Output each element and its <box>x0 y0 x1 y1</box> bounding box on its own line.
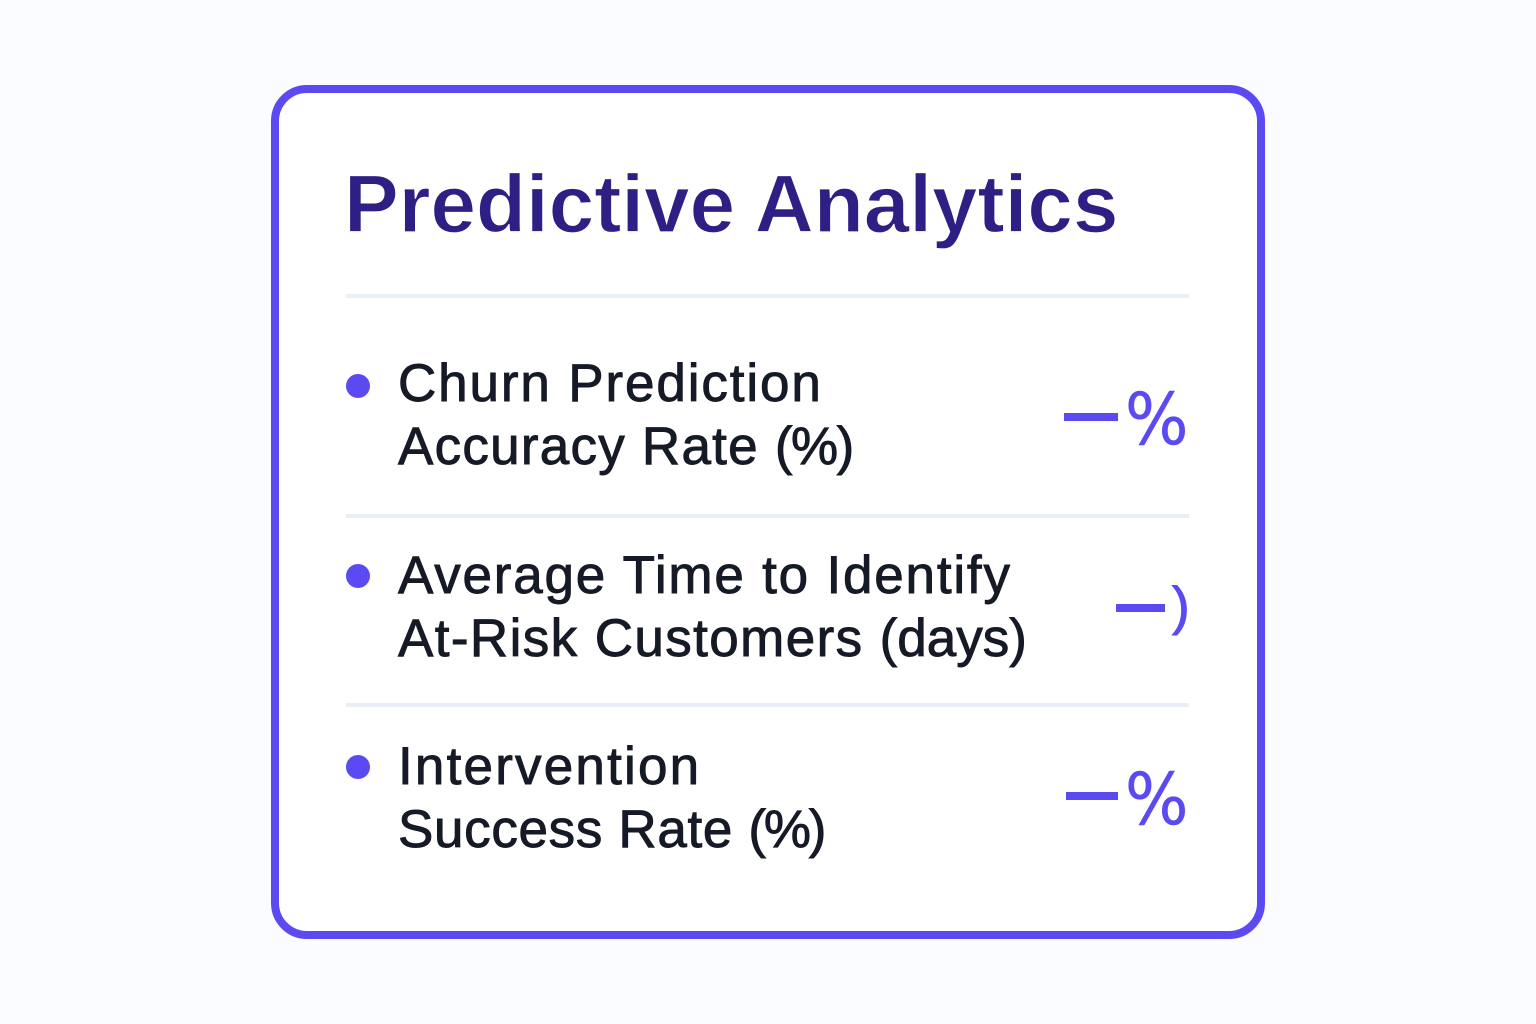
label: churn prediction accuracy rate: Accuracy Rate (%) <box>398 417 853 476</box>
label: churn prediction accuracy rate: Churn Prediction <box>398 354 823 413</box>
bullet: churn prediction <box>346 374 370 398</box>
label: average time to identify at-risk customers: Average Time to Identify <box>398 546 1012 605</box>
label: average time to identify at-risk customers <box>398 546 1027 668</box>
panel: predictive analytics card <box>271 85 1265 939</box>
label: intervention success rate <box>398 737 824 859</box>
bullet: intervention success <box>346 755 370 779</box>
label: intervention success rate: Intervention <box>398 737 701 796</box>
title: Predictive Analytics <box>344 159 1118 250</box>
value: time to identify placeholder: ) <box>1172 577 1190 636</box>
value: time to identify placeholder <box>1116 577 1190 636</box>
value: churn prediction placeholder: % <box>1125 378 1188 461</box>
label: intervention success rate: Success Rate (%) <box>398 800 824 859</box>
bullet: time to identify <box>346 564 370 588</box>
value: intervention success placeholder: % <box>1125 758 1188 841</box>
value: intervention success placeholder <box>1066 758 1188 841</box>
value: churn prediction placeholder <box>1064 378 1188 461</box>
label: churn prediction accuracy rate <box>398 354 853 476</box>
label: average time to identify at-risk customers: At-Risk Customers (days) <box>398 609 1027 668</box>
